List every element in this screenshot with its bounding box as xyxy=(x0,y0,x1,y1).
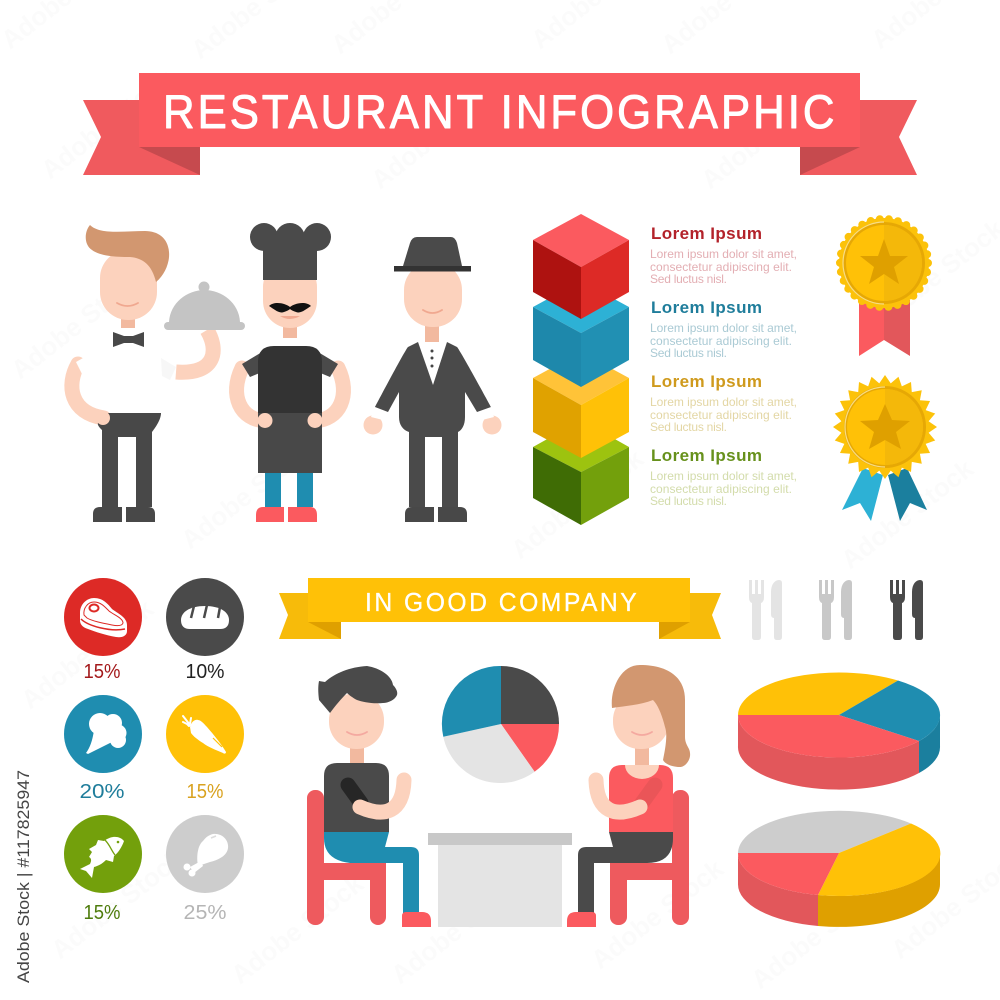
medal: scalloped gold with red ribbon xyxy=(839,218,929,356)
food icon: carrot 15% xyxy=(166,695,244,803)
food icon: fish 15% xyxy=(64,815,142,924)
cube: red xyxy=(533,214,629,319)
title text: RESTAURANT INFOGRAPHIC xyxy=(163,86,834,138)
food icon: bread 10%: 10% xyxy=(186,661,225,683)
cube: blue xyxy=(533,281,629,387)
text block: red: consectetur adipiscing elit. xyxy=(650,260,792,274)
character: waiter xyxy=(72,225,245,522)
stacked isometric cubes xyxy=(533,214,629,525)
food icon: bread 10% xyxy=(166,578,244,683)
text block: red: Lorem Ipsum xyxy=(651,224,762,243)
cube: green xyxy=(533,420,629,525)
food icon: broccoli 20% xyxy=(64,695,142,803)
text block: blue: Lorem ipsum dolor sit amet, xyxy=(650,321,797,335)
food icon: chicken drumstick 25%: 25% xyxy=(184,902,227,924)
text block: yellow xyxy=(650,372,797,434)
3D pie chart: bottom xyxy=(738,811,940,927)
cube: yellow xyxy=(533,352,629,458)
text block: yellow: Sed luctus nisl. xyxy=(650,420,727,434)
text block: blue: consectetur adipiscing elit. xyxy=(650,334,792,348)
text block: red: Sed luctus nisl. xyxy=(650,272,727,286)
text block: blue xyxy=(650,298,797,360)
text block: green: consectetur adipiscing elit. xyxy=(650,482,792,496)
seated woman on chair xyxy=(567,665,690,927)
pie chart: flat xyxy=(442,666,559,783)
food icon: chicken drumstick 25% xyxy=(166,815,244,924)
table xyxy=(428,833,572,927)
text block: yellow: Lorem Ipsum xyxy=(651,372,762,391)
text block: green: Sed luctus nisl. xyxy=(650,494,727,508)
food icon: carrot 15%: 15% xyxy=(186,781,224,803)
character: chef xyxy=(237,223,343,522)
icon: cutlery dark xyxy=(890,580,923,640)
text block: green: Lorem Ipsum xyxy=(651,446,762,465)
text block: blue: Sed luctus nisl. xyxy=(650,346,727,360)
chair right xyxy=(610,790,689,925)
icon: serving cloche xyxy=(164,282,245,330)
text block: red: Lorem ipsum dolor sit amet, xyxy=(650,247,797,261)
3D pie chart: top xyxy=(738,672,940,790)
seated man on chair xyxy=(307,666,431,927)
food icon: steak 15% xyxy=(64,578,142,683)
vertical stock credit: Adobe Stock | #117825947 xyxy=(14,770,33,983)
text block: yellow: consectetur adipiscing elit. xyxy=(650,408,792,422)
text block: blue: Lorem Ipsum xyxy=(651,298,762,317)
banner: in good company xyxy=(279,578,721,639)
food icon: broccoli 20%: 20% xyxy=(80,781,125,803)
medal: starburst gold with blue ribbons xyxy=(833,375,937,521)
banner text: IN GOOD COMPANY xyxy=(365,588,637,617)
text block: green: Lorem ipsum dolor sit amet, xyxy=(650,469,797,483)
food icon: steak 15%: 15% xyxy=(84,661,121,683)
food icon: fish 15%: 15% xyxy=(84,902,121,924)
character: gentleman xyxy=(364,237,502,522)
icon: cutlery light xyxy=(749,580,782,640)
icon: cutlery mid xyxy=(819,580,852,640)
text block: green xyxy=(650,446,797,508)
text block: red xyxy=(650,224,797,286)
chair left xyxy=(307,790,386,925)
title banner xyxy=(83,73,917,175)
text block: yellow: Lorem ipsum dolor sit amet, xyxy=(650,395,797,409)
